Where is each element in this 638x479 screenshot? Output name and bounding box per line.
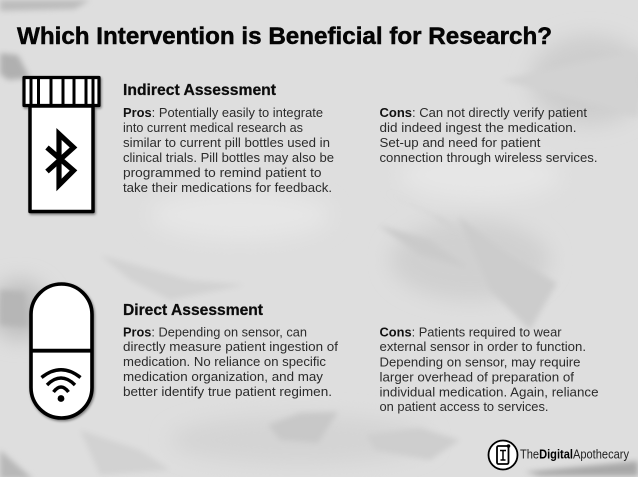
- text block: direct pros: medication. No reliance on specific: [123, 355, 326, 369]
- text block: direct cons: individual medication. Again, reliance: [380, 385, 598, 399]
- text block: direct pros: medication organization, and may: [123, 370, 324, 384]
- title: Which Intervention is Beneficial for Research?: [17, 23, 552, 50]
- text block: indirect pros: into current medical research as: [123, 121, 303, 135]
- text block: direct cons: external sensor in order to function.: [380, 340, 586, 354]
- text block: indirect cons: Cons: Can not directly verify patient: [380, 106, 588, 120]
- text block: indirect pros: take their medications for feedback.: [123, 181, 332, 195]
- text block: direct pros: Pros: Depending on sensor, can: [123, 326, 307, 340]
- text block: direct cons: larger overhead of preparation of: [380, 370, 575, 384]
- text block: indirect pros: similar to current pill bottles used in: [123, 136, 330, 150]
- text block: indirect cons: did indeed ingest the medication.: [380, 121, 576, 135]
- text block: direct pros: [123, 326, 339, 399]
- text block: indirect cons: Set-up and need for patient: [380, 136, 541, 150]
- icon: bluetooth pill bottle: [24, 78, 99, 212]
- text block: direct pros: directly measure patient ingestion of: [123, 340, 339, 354]
- text block: indirect cons: connection through wireless services.: [380, 151, 598, 165]
- text block: indirect cons: [380, 106, 598, 165]
- text block: direct cons: on patient access to services.: [380, 400, 548, 414]
- heading: indirect assessment: Indirect Assessment: [123, 82, 276, 99]
- text block: indirect pros: clinical trials. Pill bottles may also be: [123, 151, 334, 165]
- icon: logo phone mark: [488, 440, 518, 470]
- text block: direct cons: Cons: Patients required to wear: [380, 326, 562, 340]
- icon: wifi pill capsule: [30, 284, 93, 418]
- text block: direct cons: Depending on sensor, may require: [380, 356, 580, 370]
- text block: indirect pros: programmed to remind patient to: [123, 166, 322, 180]
- logo: The Digital Apothecary: [488, 440, 630, 470]
- text block: direct cons: [380, 326, 598, 414]
- logo wordmark: TheDigitalApothecary: [520, 448, 630, 462]
- heading: direct assessment: Direct Assessment: [123, 302, 263, 319]
- text block: direct pros: better identify true patient regimen.: [123, 385, 332, 399]
- text block: indirect pros: Pros: Potentially easily to integrate: [123, 106, 323, 120]
- text block: indirect pros: [123, 106, 334, 195]
